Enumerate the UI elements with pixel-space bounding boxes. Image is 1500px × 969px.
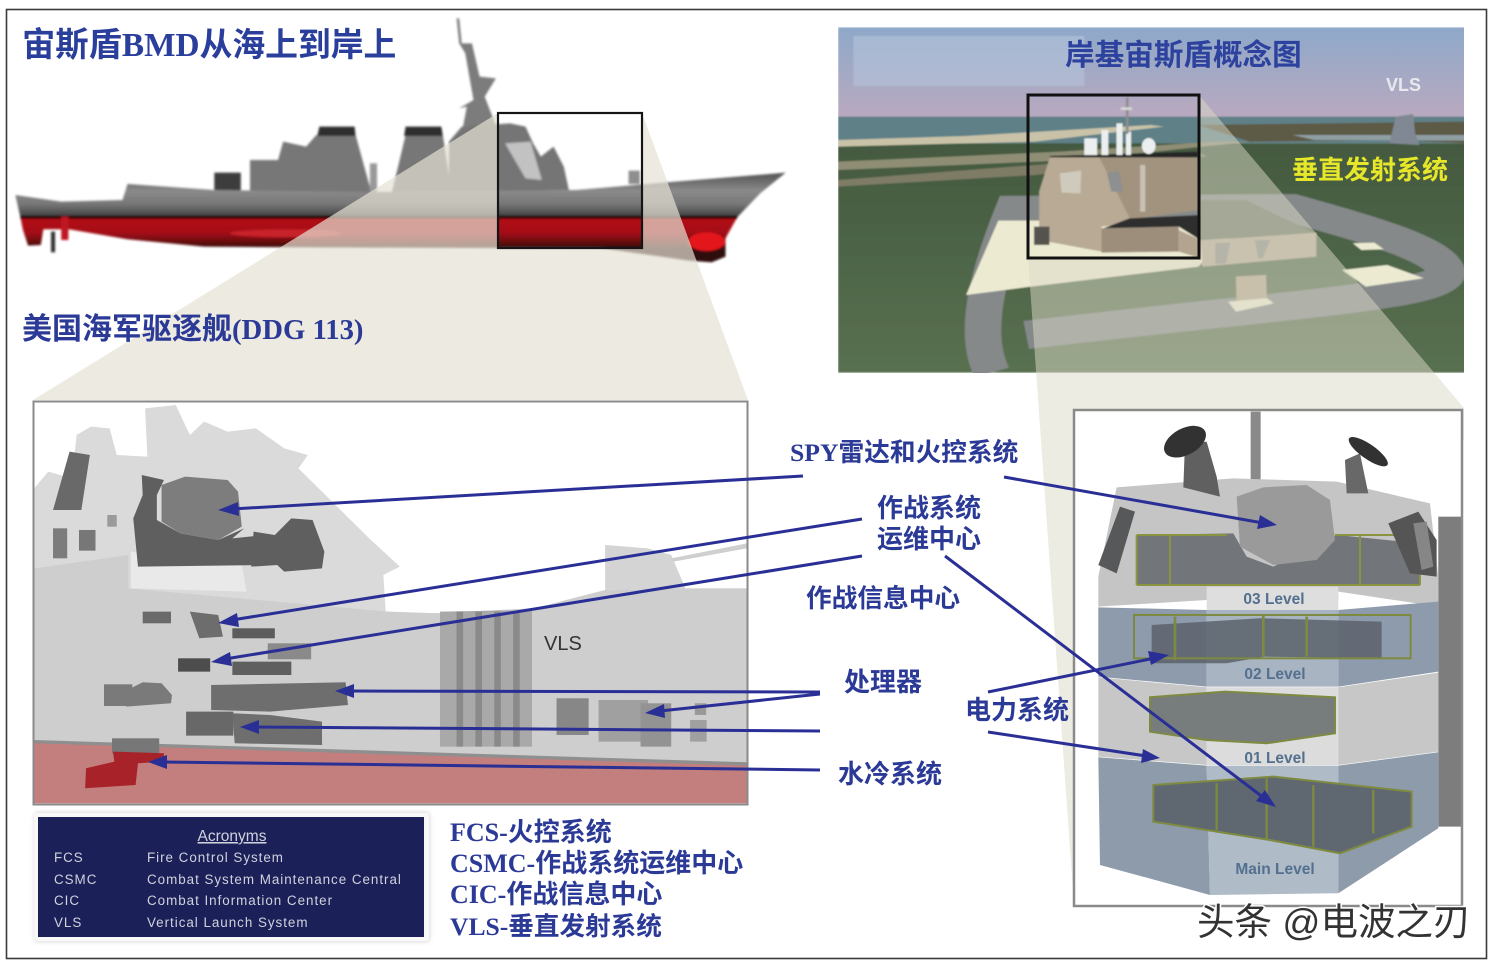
watermark: 头条 @电波之刃	[1197, 901, 1470, 943]
row: CIC: CIC	[54, 893, 80, 908]
tower panel background	[1074, 410, 1462, 906]
arrow: CIC to ship	[211, 556, 862, 666]
ship panel: destroyer side view with zoom cone	[15, 18, 786, 400]
acronyms table	[34, 812, 430, 942]
main title: 宙斯盾BMD从海上到岸上	[22, 27, 396, 64]
panel: land-based Aegis scene	[838, 27, 1467, 905]
label: combat system maintenance: 作战系统	[877, 494, 981, 523]
cutaway background	[33, 401, 748, 804]
VLS label: VLS	[1386, 75, 1421, 95]
vertical launch label: 垂直发射系统	[1292, 155, 1448, 185]
row: CIC: Combat Information Center	[147, 893, 333, 908]
destroyer illustration	[15, 18, 786, 262]
aerial scene	[838, 27, 1467, 373]
arrow: SPY to ship radar	[218, 476, 803, 516]
CSMC translation: CSMC-作战系统运维中心	[450, 849, 743, 878]
arrow: power to main level	[988, 732, 1160, 763]
untinted building inside selection box	[1030, 96, 1198, 256]
VLS translation: VLS-垂直发射系统	[450, 912, 662, 941]
panel: ship cutaway	[33, 401, 748, 804]
VLS tag: VLS	[544, 633, 582, 655]
row: VLS: VLS	[54, 915, 82, 930]
tower panel border	[1074, 410, 1462, 906]
label: power system: 电力系统	[965, 696, 1069, 725]
table shadow	[34, 812, 430, 942]
FCS translation: FCS-火控系统	[450, 818, 612, 847]
arrow: water cooling	[148, 755, 820, 770]
cutaway border	[34, 402, 748, 804]
white backing inside selection box	[498, 113, 642, 248]
row: VLS: Vertical Launch System	[147, 915, 308, 930]
zoom cone from ship box to cutaway	[33, 113, 748, 400]
table heading: Acronyms	[198, 828, 267, 845]
scene title: 岸基宙斯盾概念图	[1065, 38, 1302, 72]
tower levels artwork	[1098, 412, 1462, 895]
03 level label: 03 Level	[1243, 591, 1305, 608]
callout labels	[790, 438, 1069, 789]
label: combat information center: 作战信息中心	[806, 584, 960, 613]
CIC translation: CIC-作战信息中心	[450, 880, 662, 909]
arrow: SPY to tower radar	[1004, 477, 1277, 529]
ship name label: 美国海军驱逐舰(DDG 113)	[22, 313, 363, 346]
untinted ship inside selection box	[499, 122, 641, 247]
row: CSMC: Combat System Maintenance Central	[147, 872, 402, 887]
zoom cone from building to tower	[1028, 95, 1464, 905]
row: FCS: Fire Control System	[147, 850, 284, 865]
row: CSMC: CSMC	[54, 872, 97, 887]
label: processors: 处理器	[844, 668, 922, 697]
label: SPY radar: SPY雷达和火控系统	[790, 438, 1018, 467]
01 level label: 01 Level	[1244, 750, 1306, 767]
02 level label: 02 Level	[1244, 666, 1306, 683]
label: water cooling: 水冷系统	[838, 760, 942, 789]
selection box on ship	[498, 113, 642, 248]
arrow: CSMC to main level	[945, 556, 1276, 807]
arrow: processor lower	[240, 720, 820, 734]
arrow: processor upper	[335, 684, 820, 698]
panel: tower cutaway	[1074, 410, 1462, 906]
row: FCS: FCS	[54, 850, 84, 865]
table card	[34, 813, 429, 941]
selection box on building	[1028, 95, 1199, 258]
table background	[38, 817, 424, 937]
arrow: CSMC to ship	[218, 519, 862, 627]
main level label: Main Level	[1235, 861, 1315, 878]
acronym translations	[450, 818, 743, 941]
arrow: processor aft	[645, 694, 820, 718]
arrow: power to 02 level	[988, 651, 1169, 692]
cutaway artwork	[34, 405, 747, 803]
label: combat system maintenance: 运维中心	[877, 525, 981, 554]
callout arrows	[148, 476, 1277, 807]
